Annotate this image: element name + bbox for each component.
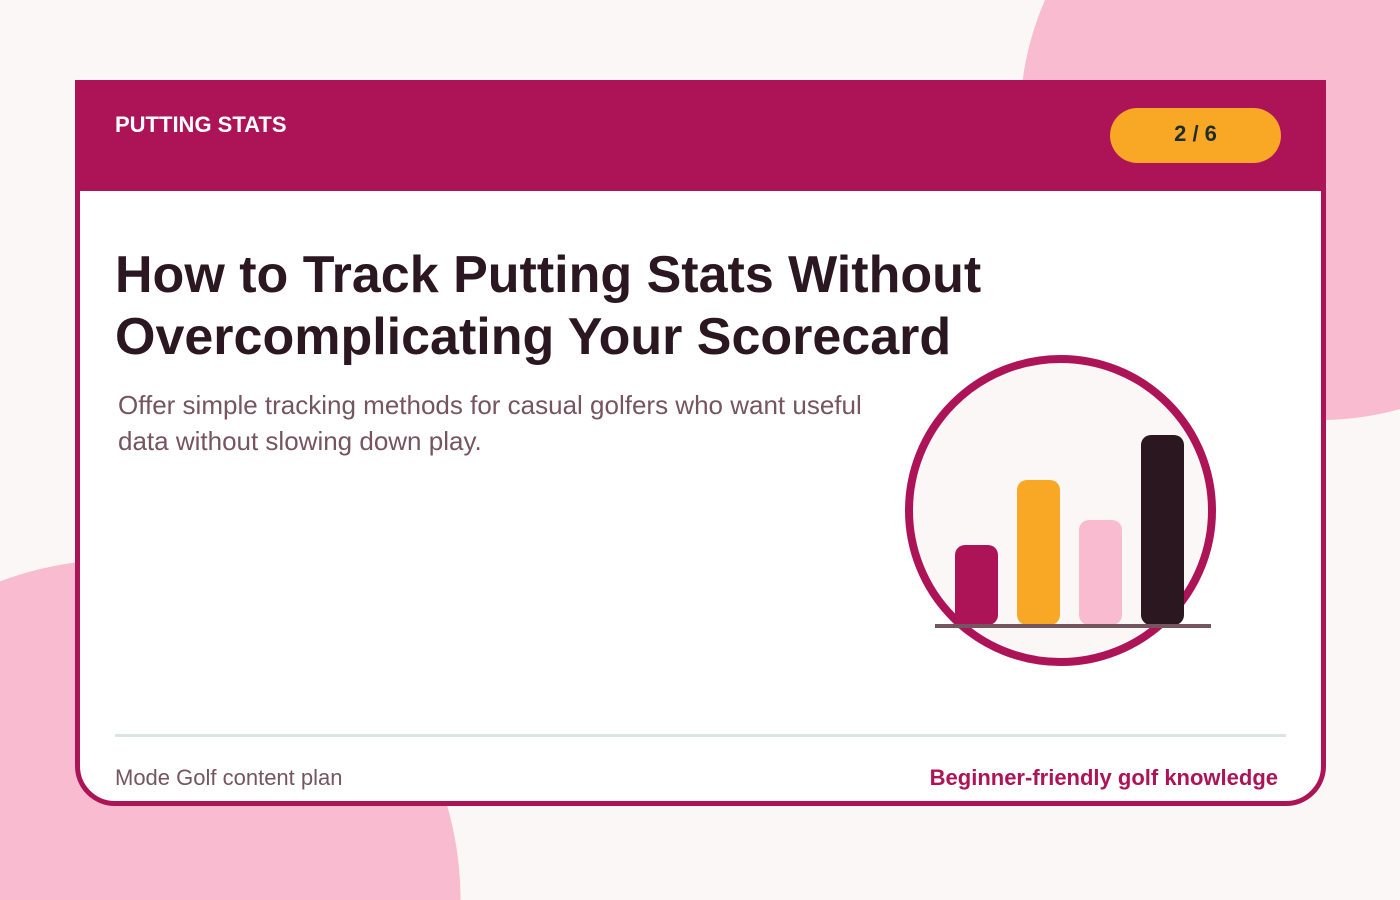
bar 3 [1079,520,1122,625]
title: Overcomplicating Your Scorecard [115,308,951,366]
background blob: bottom left [0,562,460,900]
subtitle: Offer simple tracking methods for casual golfers who want useful [118,390,862,420]
card [75,80,1326,806]
bar 4 [1141,435,1184,625]
footer divider [115,734,1286,737]
bar 1 [955,545,998,625]
header label: PUTTING STATS [115,112,287,137]
title: How to Track Putting Stats Without [115,246,981,304]
illustration: bar chart in circle [905,355,1216,666]
background blob: top right [1022,0,1400,420]
header band [75,80,1326,191]
page badge [1110,108,1281,163]
footer right text: Beginner-friendly golf knowledge [930,765,1278,790]
subtitle [118,390,862,456]
bar 2 [1017,480,1060,625]
page badge: 2 / 6 [1174,121,1217,146]
footer left text: Mode Golf content plan [115,765,342,790]
subtitle: data without slowing down play. [118,426,482,456]
title [115,246,981,366]
chart baseline [935,624,1211,628]
circle [905,355,1216,666]
